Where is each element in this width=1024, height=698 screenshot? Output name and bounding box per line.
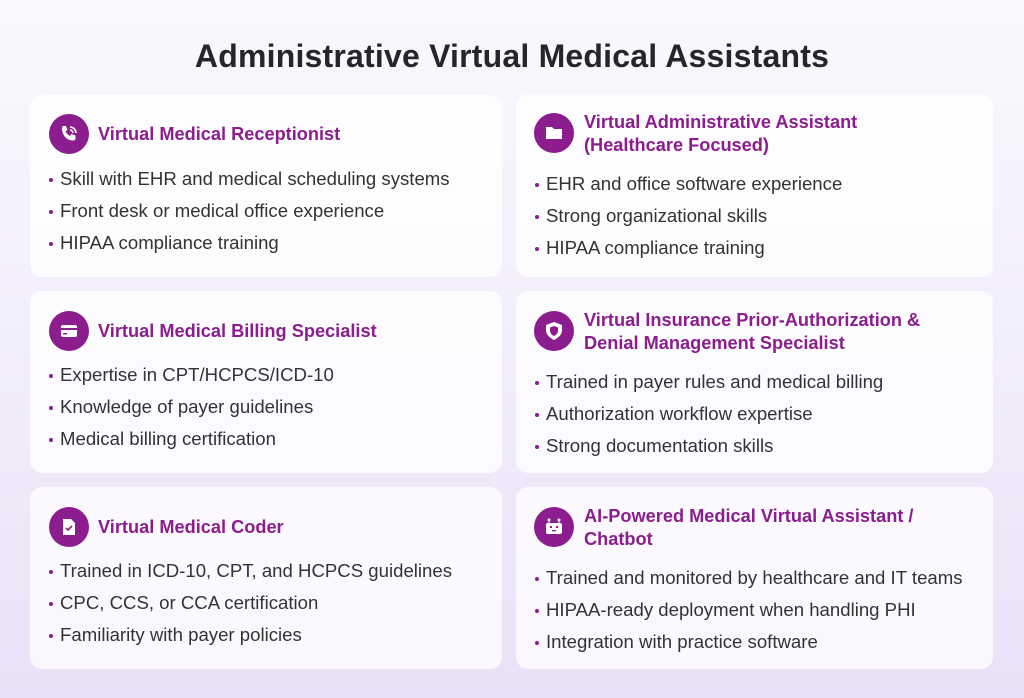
bullets: Expertise in CPT/HCPCS/ICD-10 <box>60 364 334 385</box>
heading: Virtual Insurance Prior-Authorization & <box>584 310 920 330</box>
bullets: Medical billing certification <box>60 428 276 449</box>
bullets: Trained in ICD-10, CPT, and HCPCS guidelines <box>60 560 452 581</box>
heading <box>584 310 920 353</box>
heading: (Healthcare Focused) <box>584 135 769 155</box>
bullets: Integration with practice software <box>546 631 818 652</box>
heading: Denial Management Specialist <box>584 333 845 353</box>
bullets: CPC, CCS, or CCA certification <box>60 592 318 613</box>
icon: robot <box>534 507 574 547</box>
panel: AI chatbot <box>516 487 993 669</box>
panel: medical coder <box>30 487 502 669</box>
heading <box>584 506 914 549</box>
bullets: Trained in payer rules and medical billing <box>546 371 883 392</box>
bullets <box>535 567 963 652</box>
heading: Virtual Medical Billing Specialist <box>98 321 377 341</box>
bullets: Familiarity with payer policies <box>60 624 302 645</box>
bullets: Skill with EHR and medical scheduling systems <box>60 168 450 189</box>
bullets: HIPAA compliance training <box>60 232 279 253</box>
bullets: EHR and office software experience <box>546 173 842 194</box>
bullets <box>535 173 842 258</box>
icon: folder <box>534 113 574 153</box>
title: Administrative Virtual Medical Assistants <box>195 38 829 74</box>
panel: prior authorization <box>516 291 993 473</box>
panel: billing specialist <box>30 291 502 473</box>
icon: shield <box>534 311 574 351</box>
bullets <box>49 560 452 645</box>
bullets: Trained and monitored by healthcare and IT teams <box>546 567 963 588</box>
bullets: Strong organizational skills <box>546 205 767 226</box>
bullets: HIPAA compliance training <box>546 237 765 258</box>
bullets <box>535 371 883 456</box>
heading: Chatbot <box>584 529 653 549</box>
icon: document <box>49 507 89 547</box>
bullets: Authorization workflow expertise <box>546 403 813 424</box>
bullets <box>49 364 334 449</box>
heading: Virtual Administrative Assistant <box>584 112 857 132</box>
heading: Virtual Medical Coder <box>98 517 284 537</box>
icon: phone <box>49 114 89 154</box>
bullets: Front desk or medical office experience <box>60 200 384 221</box>
icon: card <box>49 311 89 351</box>
panel: administrative assistant <box>516 94 993 277</box>
bullets: Knowledge of payer guidelines <box>60 396 313 417</box>
heading <box>584 112 857 155</box>
heading: AI-Powered Medical Virtual Assistant / <box>584 506 914 526</box>
bullets: HIPAA-ready deployment when handling PHI <box>546 599 916 620</box>
bullets <box>49 168 450 253</box>
bullets: Strong documentation skills <box>546 435 773 456</box>
heading: Virtual Medical Receptionist <box>98 124 340 144</box>
panel: receptionist <box>30 95 502 277</box>
